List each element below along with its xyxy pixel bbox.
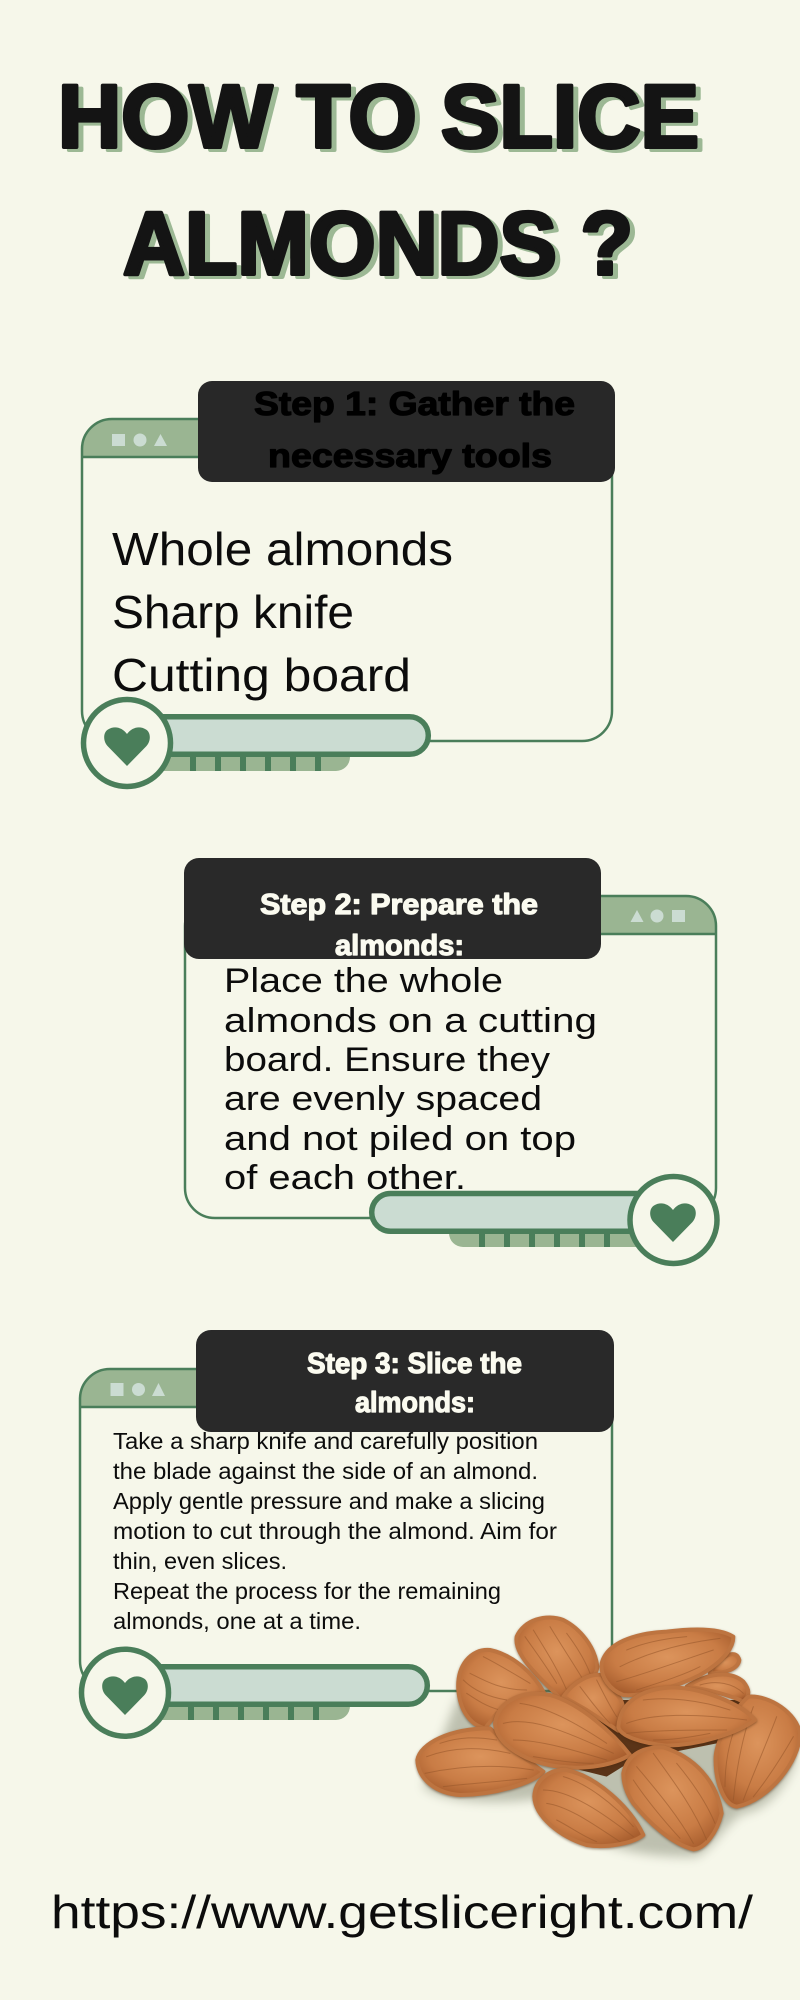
step 3 instructions: Take a sharp knife and carefully position bbox=[113, 1428, 538, 1454]
step 2 instructions: and not piled on top bbox=[224, 1120, 576, 1158]
step 3 heading: Step 3: Slice the bbox=[307, 1348, 522, 1380]
step 1 heading: Step 1: Gather the bbox=[254, 385, 575, 422]
step 3 instructions: motion to cut through the almond. Aim for bbox=[113, 1518, 557, 1544]
icon: heart badge bbox=[630, 1176, 717, 1264]
step 1 window icons bbox=[112, 434, 167, 446]
step 3 instructions: thin, even slices. bbox=[113, 1548, 287, 1574]
step 2 heading: almonds: bbox=[335, 930, 464, 962]
step 1 heading bbox=[198, 381, 615, 482]
title bbox=[58, 66, 699, 293]
icon: heart badge bbox=[82, 1649, 168, 1736]
step 2 instructions: board. Ensure they bbox=[224, 1041, 550, 1079]
step 2 window frame bbox=[185, 896, 716, 1218]
step 3 heading: almonds: bbox=[355, 1387, 475, 1419]
icon: heart badge bbox=[84, 700, 170, 786]
step 2 instructions: almonds on a cutting bbox=[224, 1002, 597, 1040]
step 1 tools list: Cutting board bbox=[112, 649, 411, 701]
step 1 progress bar bbox=[110, 717, 428, 771]
step 2 instructions: are evenly spaced bbox=[224, 1080, 542, 1118]
step 2 progress bar bbox=[372, 1194, 672, 1247]
step 1 tools list bbox=[112, 523, 453, 701]
step 1 window frame bbox=[82, 419, 612, 741]
panel: step 2 bbox=[184, 858, 717, 1264]
step 2 heading bbox=[184, 858, 601, 962]
step 3 instructions: the blade against the side of an almond. bbox=[113, 1458, 538, 1484]
step 2 heading: Step 2: Prepare the bbox=[260, 889, 538, 921]
title: ALMONDS ? bbox=[123, 193, 633, 293]
step 3 progress bar bbox=[108, 1667, 427, 1720]
step 2 window icons bbox=[630, 910, 685, 922]
icon: pile of almonds bbox=[417, 1617, 800, 1857]
step 3 window icons bbox=[110, 1383, 165, 1396]
title: HOW TO SLICE bbox=[58, 66, 699, 166]
step 1 heading: necessary tools bbox=[268, 437, 552, 474]
step 3 window frame bbox=[80, 1369, 612, 1691]
step 2 instructions: Place the whole bbox=[224, 962, 503, 1000]
step 3 instructions: Repeat the process for the remaining bbox=[113, 1578, 501, 1604]
panel: step 1 bbox=[82, 381, 615, 786]
step 1 tools list: Whole almonds bbox=[112, 523, 453, 575]
step 3 instructions: Apply gentle pressure and make a slicing bbox=[113, 1488, 545, 1514]
step 2 instructions: of each other. bbox=[224, 1159, 466, 1197]
step 3 instructions: almonds, one at a time. bbox=[113, 1608, 361, 1634]
step 1 tools list: Sharp knife bbox=[112, 586, 354, 638]
step 3 heading bbox=[196, 1330, 614, 1432]
step 3 instructions bbox=[113, 1428, 557, 1634]
website url: https://www.getsliceright.com/ bbox=[51, 1886, 753, 1938]
step 2 instructions bbox=[224, 962, 597, 1197]
panel: step 3 bbox=[80, 1330, 614, 1736]
